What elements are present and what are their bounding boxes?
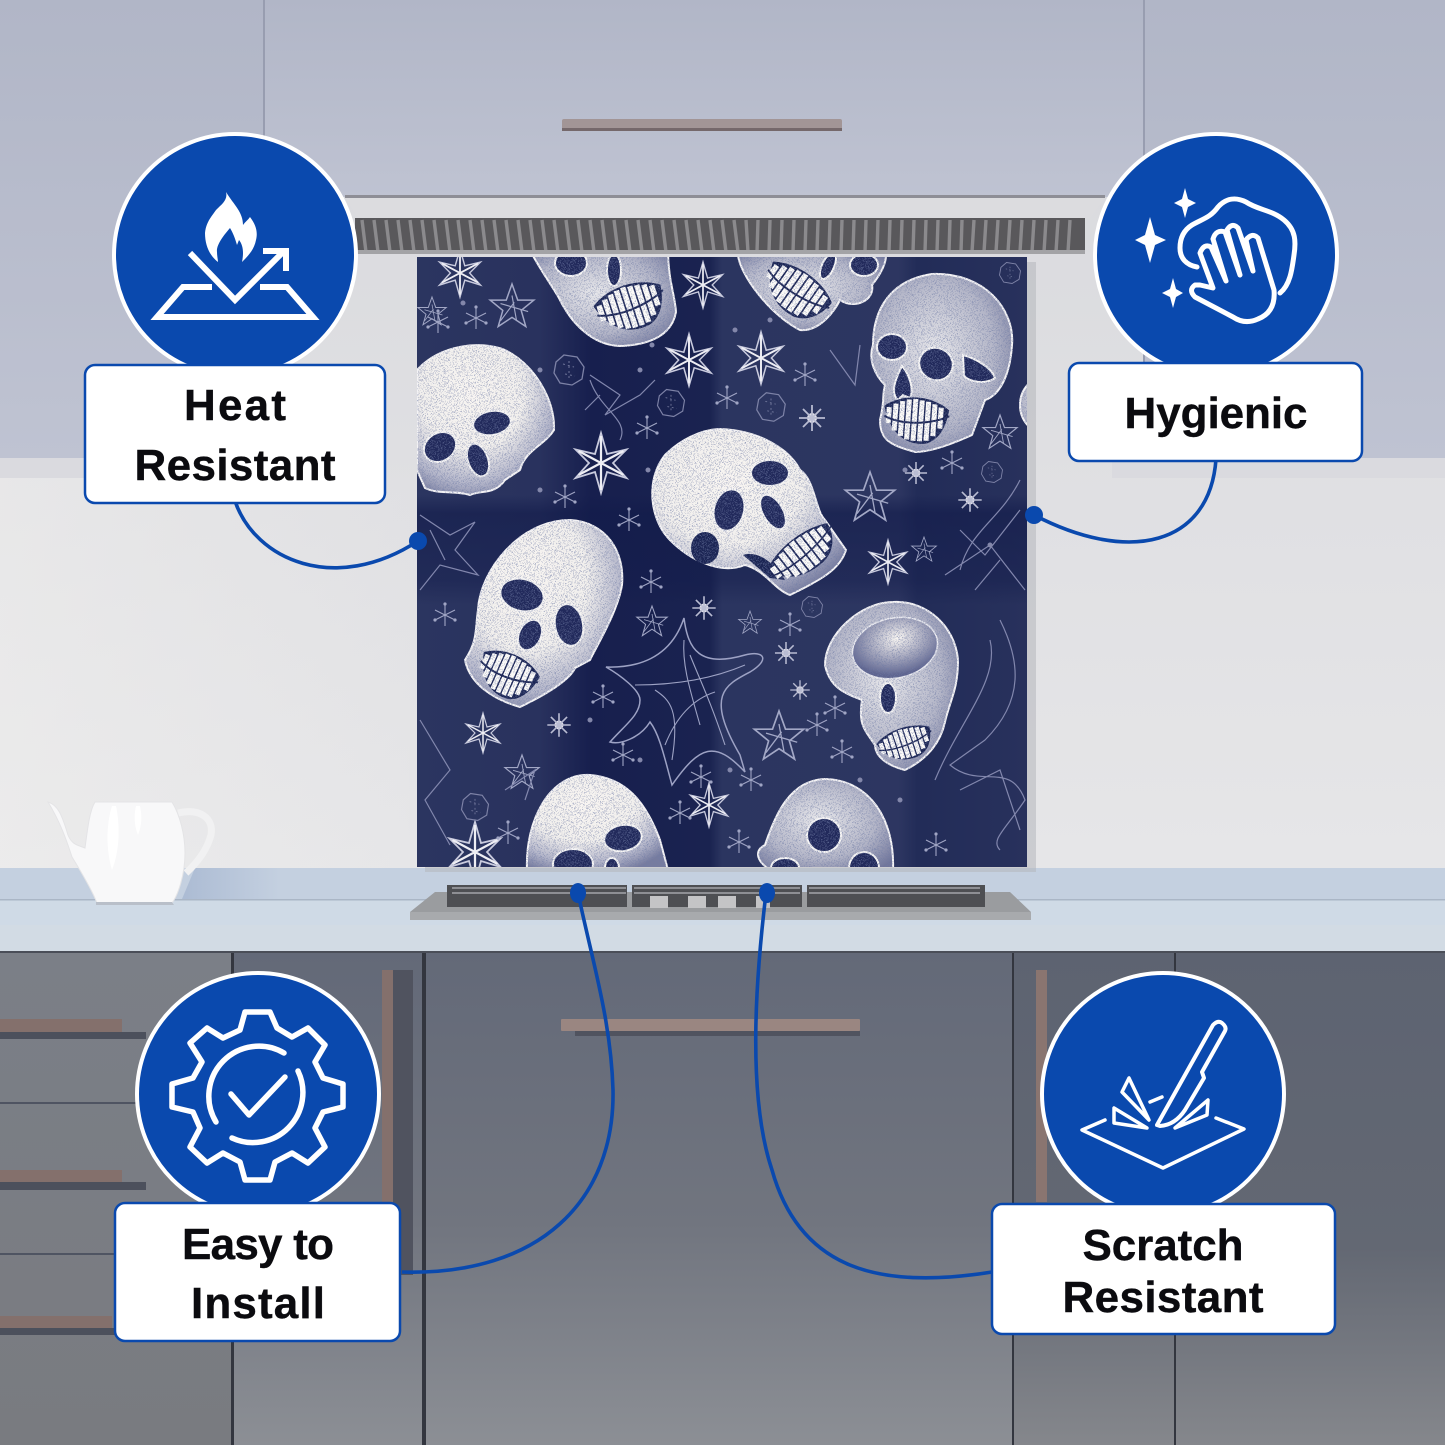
cooktop (410, 885, 1031, 920)
skull right (871, 274, 1012, 452)
connector: heat resistant (235, 501, 427, 568)
stars and snowflakes (418, 249, 1020, 882)
icon: knife scratching surface (1082, 1022, 1244, 1168)
upper cabinets (0, 0, 1445, 478)
icon circle: heat (114, 134, 356, 376)
label: hygienic: Hygienic (1124, 389, 1308, 438)
panel shadow (425, 262, 1036, 872)
countertop (0, 868, 1445, 953)
dots (463, 303, 990, 800)
label: heat resistant: Heat (184, 381, 286, 430)
starfish (606, 618, 763, 785)
label: scratch resistant (992, 1204, 1335, 1334)
range hood (345, 195, 1105, 254)
skull centre (652, 429, 846, 595)
badge: easy to install (115, 973, 400, 1341)
skull left-centre (465, 520, 622, 708)
skull bottom right (758, 779, 893, 884)
skull top right-centre (738, 251, 886, 331)
label: easy to install: Easy to (182, 1220, 334, 1269)
skull edge (1020, 377, 1070, 433)
label: heat resistant (85, 365, 385, 503)
skull top centre (530, 250, 676, 346)
label: easy to install (115, 1203, 400, 1341)
connector: easy to install (402, 883, 613, 1272)
icon: gear with check (172, 1012, 343, 1180)
icon circle: easy to install (137, 973, 379, 1215)
skull left (417, 345, 554, 495)
skull right lower (825, 602, 958, 770)
connector: hygienic (1025, 459, 1216, 542)
skull bottom left (527, 775, 668, 879)
skulls (417, 257, 1027, 867)
product panel: skull pattern splashback (417, 257, 1027, 867)
icon: flame over surface with arrow (157, 192, 313, 317)
icon circle: hygienic (1095, 134, 1337, 376)
badge: hygienic (1069, 134, 1362, 461)
scribbles (420, 345, 1025, 850)
lower cabinets (0, 953, 1445, 1445)
connector: scratch resistant (756, 883, 992, 1278)
icon circle: scratch (1042, 973, 1284, 1215)
icon: hand wiping with sparkles (1135, 188, 1295, 322)
label: scratch resistant: Resistant (1062, 1273, 1264, 1322)
badge: heat resistant (85, 134, 385, 503)
kettle (48, 802, 211, 905)
label: easy to install: Install (191, 1279, 325, 1328)
label: heat resistant: Resistant (134, 441, 336, 490)
label: scratch resistant: Scratch (1082, 1221, 1244, 1270)
label: hygienic (1069, 363, 1362, 461)
badge: scratch resistant (992, 973, 1335, 1334)
